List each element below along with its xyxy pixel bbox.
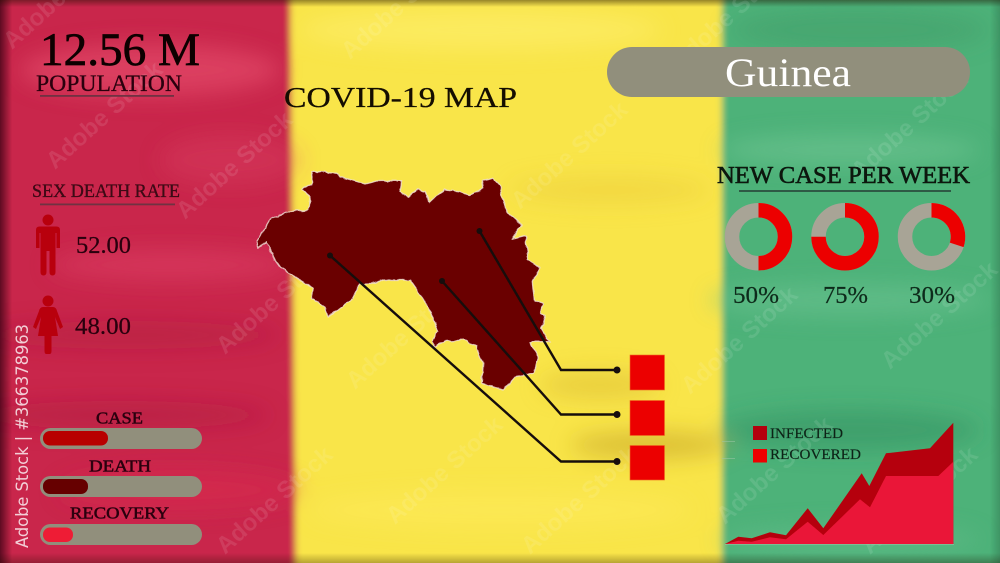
area chart: infected and recovered [722,423,954,544]
recovered area [725,462,953,544]
case bar [40,408,202,449]
case bar: CASE [96,408,143,428]
watermark pattern: Adobe Stock [506,96,634,214]
percent labels: 50% [733,283,779,309]
recovery bar [40,504,202,545]
watermark pattern: Adobe Stock [856,441,984,559]
icon: female figure [33,296,63,354]
title: COVID-19 map: COVID-19 MAP [284,82,517,114]
watermark pattern: Adobe Stock [516,441,644,559]
percent labels: 30% [909,283,955,309]
death bar [40,456,202,497]
watermark pattern: Adobe Stock [41,56,169,174]
watermark pattern: Adobe Stock [171,106,299,224]
watermark pattern: Adobe Stock [341,276,469,394]
percent labels: 75% [823,283,868,309]
legend [753,426,861,463]
connector lines [327,228,620,465]
panel: new case per week [717,163,971,309]
percent labels [733,283,955,309]
watermark pattern: Adobe Stock [711,411,839,529]
vertical stock id text: Adobe Stock | #366378963 [13,324,33,548]
panel: population [36,24,200,97]
country name pill: Guinea [725,50,851,95]
watermark pattern: Adobe Stock [676,281,804,399]
population label: POPULATION [36,71,182,96]
heading: NEW CASE PER WEEK [717,163,971,189]
map: Guinea [257,172,550,390]
red marker squares [630,355,664,480]
recovery bar: RECOVERY [70,504,169,522]
donut 75% [818,210,872,263]
country name pill [607,47,970,97]
donut 50% [732,210,785,263]
icon: male figure [36,214,60,276]
sex death rate heading: SEX DEATH RATE [32,182,180,202]
female value: 48.00 [75,313,131,340]
watermark pattern: Adobe Stock [211,441,339,559]
legend: RECOVERED [770,447,861,463]
panel: progress bars [40,408,202,545]
panel: sex death rate [32,182,180,354]
death bar: DEATH [89,456,151,476]
watermark pattern: Adobe Stock [211,241,339,359]
population value: 12.56 M [40,24,200,76]
watermark pattern: Adobe Stock [876,256,1000,374]
watermark pattern: Adobe Stock [846,66,974,184]
infected area [725,423,953,544]
watermark pattern: Adobe Stock [381,411,509,529]
chart axes [722,442,954,544]
legend: INFECTED [770,426,843,442]
donut 30% [905,210,958,263]
male value: 52.00 [76,232,131,259]
